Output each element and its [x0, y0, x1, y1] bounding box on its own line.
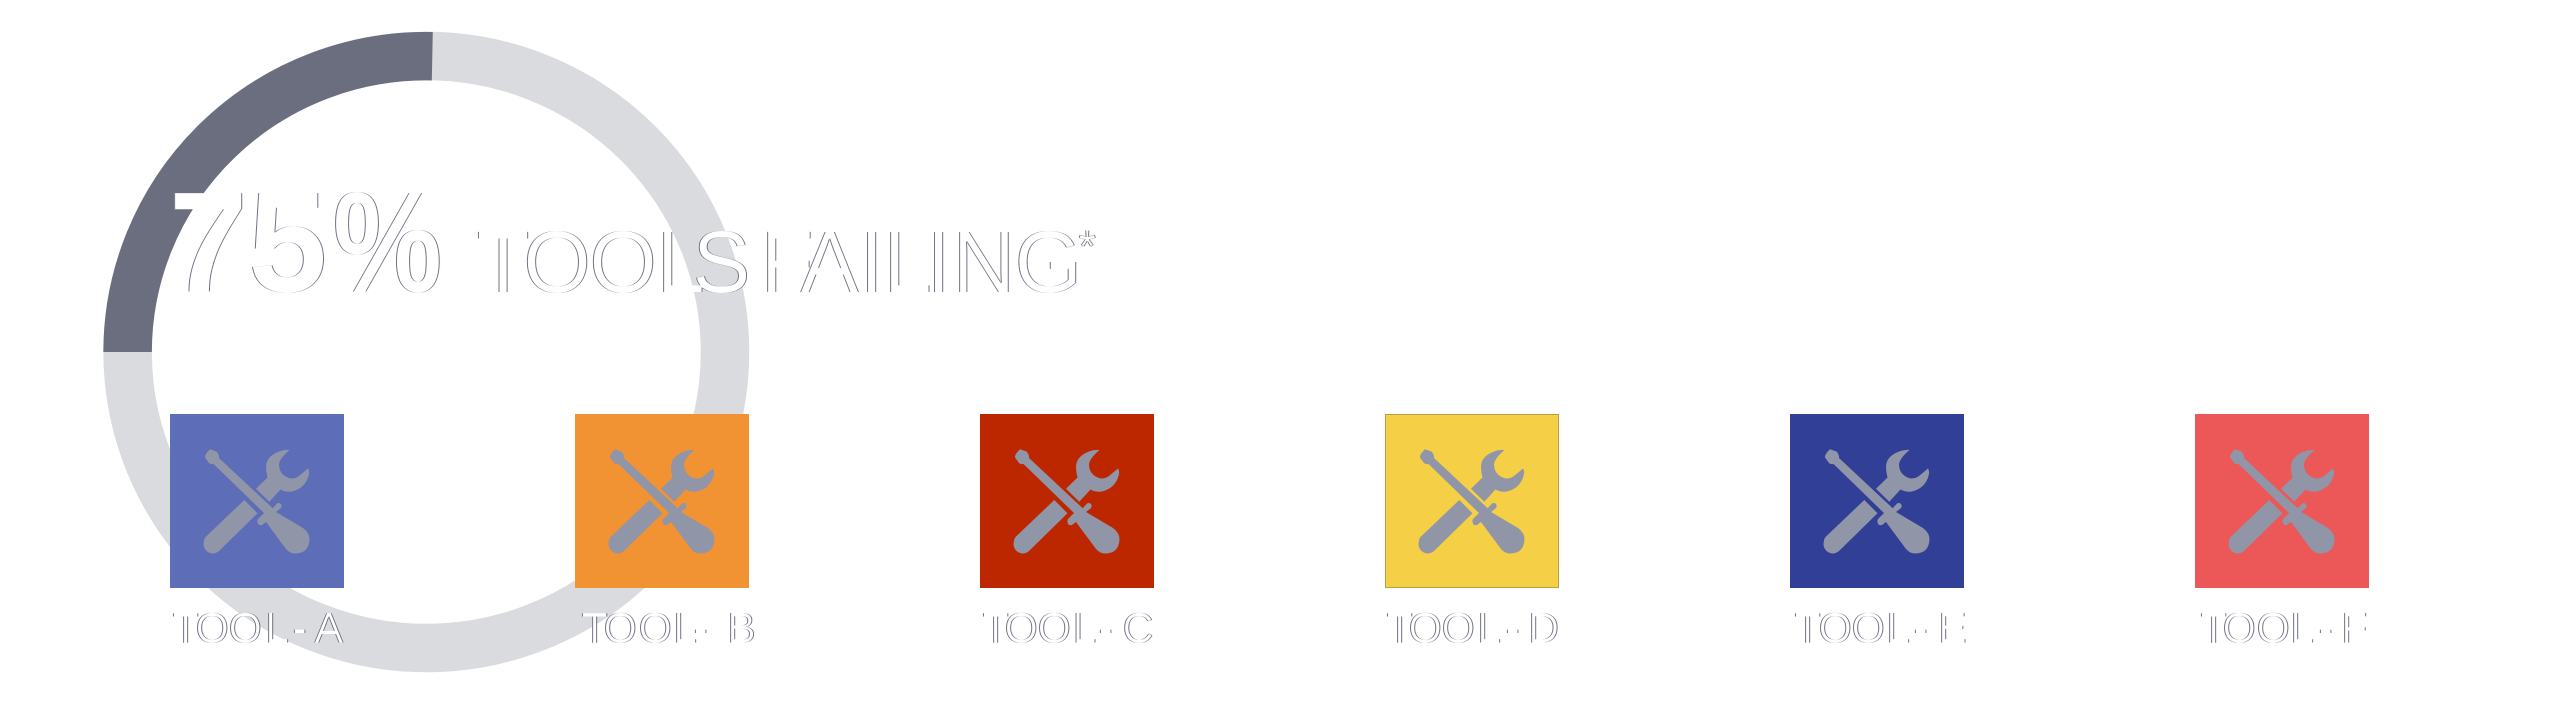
label: tool E: O [1851, 604, 1884, 652]
label: tool A: O [228, 604, 261, 652]
label: tool E: - [1913, 604, 1939, 652]
heading label: L [883, 214, 931, 311]
label: tool B: T [581, 604, 607, 652]
icon: wrench and screwdriver A [204, 449, 310, 554]
big percentage: 75 [168, 164, 327, 322]
label: tool E: E [1938, 604, 1966, 652]
label: tool F: O [2256, 604, 2289, 652]
label: tool F: T [2200, 604, 2226, 652]
label: tool C: - [1098, 604, 1124, 652]
heading label: N [952, 214, 1015, 311]
label: tool A: A [314, 604, 343, 652]
heading label: F [760, 214, 813, 311]
label: tool F: O [2222, 604, 2255, 652]
label: tool A: O [195, 604, 228, 652]
label: tool F: - [2318, 604, 2344, 652]
label: tool C: T [982, 604, 1008, 652]
icon: wrench and screwdriver C [1014, 449, 1120, 554]
icon: wrench and screwdriver E [1824, 449, 1930, 554]
heading label: T [476, 214, 529, 311]
heading label: I [926, 214, 950, 311]
tile C [980, 414, 1154, 588]
tool card F [2195, 414, 2369, 588]
tile E [1790, 414, 1964, 588]
label: tool B: O [603, 604, 636, 652]
heading: 75% tools failing [168, 164, 1096, 322]
label: tool D: D [1528, 604, 1559, 652]
label: tool D: L [1477, 604, 1511, 652]
tile A [170, 414, 344, 588]
label: tool B: B [727, 604, 755, 652]
label: tool D: O [1408, 604, 1441, 652]
label: tool B: - [693, 604, 719, 652]
tool labels [172, 604, 2367, 652]
icon: wrench and screwdriver F [2229, 449, 2334, 554]
heading label: I [859, 214, 883, 311]
tool card D [1386, 414, 1558, 588]
heading label: O [523, 214, 590, 311]
label: tool A: T [172, 604, 198, 652]
heading label: * [1078, 221, 1096, 272]
label: tool A: - [292, 604, 318, 652]
label: tool B: L [673, 604, 707, 652]
icon: wrench and screwdriver D [1419, 449, 1524, 554]
tool card E [1790, 414, 1964, 588]
label: tool C: O [1037, 604, 1070, 652]
label: tool D: - [1505, 604, 1531, 652]
heading label: O [589, 214, 656, 311]
label: tool C: C [1122, 604, 1153, 652]
heading label: G [1014, 214, 1082, 311]
tool card C [980, 414, 1154, 588]
label: tool E: T [1794, 604, 1820, 652]
label: tool B: O [638, 604, 671, 652]
tool card B [575, 414, 749, 588]
heading label: S [692, 214, 774, 311]
label: tool D: T [1386, 604, 1412, 652]
heading label: A [800, 214, 858, 311]
donut chart: 75% ring [128, 56, 725, 648]
tool card A [170, 414, 344, 588]
label: tool C: L [1072, 604, 1106, 652]
icon: wrench and screwdriver B [609, 449, 714, 554]
label: tool C: O [1004, 604, 1037, 652]
big percentage [168, 164, 442, 322]
tile B [575, 414, 749, 588]
tile D [1386, 414, 1558, 588]
tile F [2195, 414, 2369, 588]
label: tool E: L [1886, 604, 1920, 652]
label: tool E: O [1818, 604, 1851, 652]
big percentage: % [332, 164, 442, 322]
label: tool F: F [2341, 604, 2367, 652]
label: tool F: L [2290, 604, 2324, 652]
heading label: L [656, 214, 704, 311]
ring filled segment [128, 56, 432, 352]
label: tool A: L [265, 604, 299, 652]
ring track [128, 56, 725, 648]
label: tool D: O [1441, 604, 1474, 652]
